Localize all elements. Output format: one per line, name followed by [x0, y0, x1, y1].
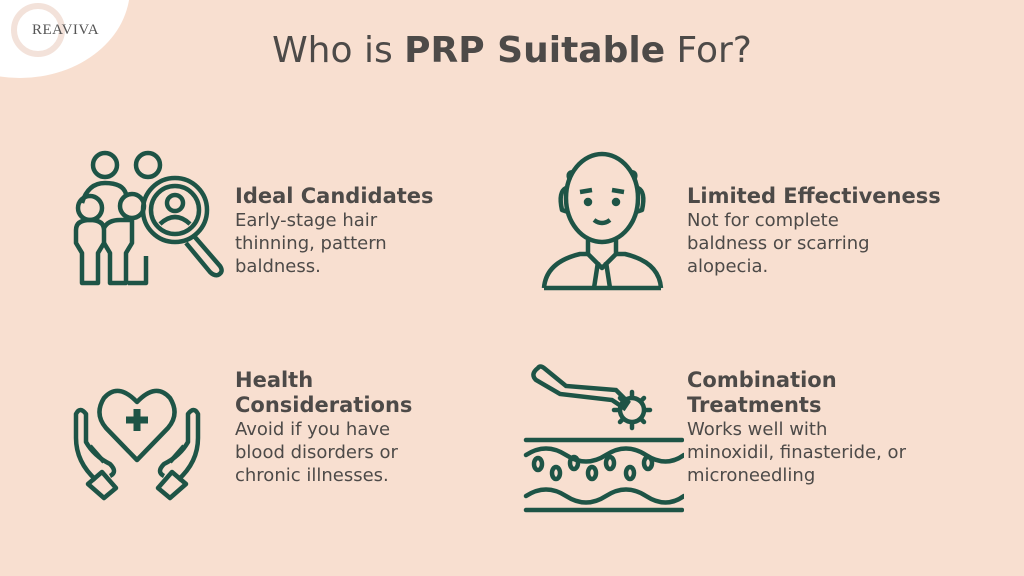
- icon: people with magnifier: [74, 150, 224, 286]
- text: combination treatments: Works well with: [687, 419, 827, 440]
- text: combination treatments: [687, 368, 906, 486]
- text: limited effectiveness: [687, 184, 941, 277]
- icon: microneedling skin: [524, 364, 684, 512]
- text: health considerations: Avoid if you have blood disorders or chronic illnesses.: [235, 419, 398, 486]
- text: limited effectiveness: Not for complete baldness or scarring alopecia.: [687, 210, 870, 277]
- icon: hands with heart: [74, 388, 200, 500]
- text: health considerations: Considerations: [235, 393, 412, 417]
- icon: bald man: [542, 152, 664, 290]
- text: ideal candidates: Ideal Candidates: [235, 184, 434, 208]
- text: combination treatments: Combination: [687, 368, 837, 392]
- logo: REAVIVA: [32, 22, 99, 38]
- text: health considerations: [235, 368, 412, 486]
- title: Who is PRP Suitable For?: [272, 30, 752, 71]
- text: combination treatments: Treatments: [687, 393, 821, 417]
- text: combination treatments: microneedling: [687, 465, 815, 486]
- text: combination treatments: minoxidil, finasteride, or: [687, 442, 906, 463]
- text: health considerations: Health: [235, 368, 313, 392]
- logo: [0, 0, 129, 78]
- text: ideal candidates: [235, 184, 434, 277]
- text: limited effectiveness: Limited Effectiveness: [687, 184, 941, 208]
- text: ideal candidates: Early-stage hair thinning, pattern baldness.: [235, 210, 387, 277]
